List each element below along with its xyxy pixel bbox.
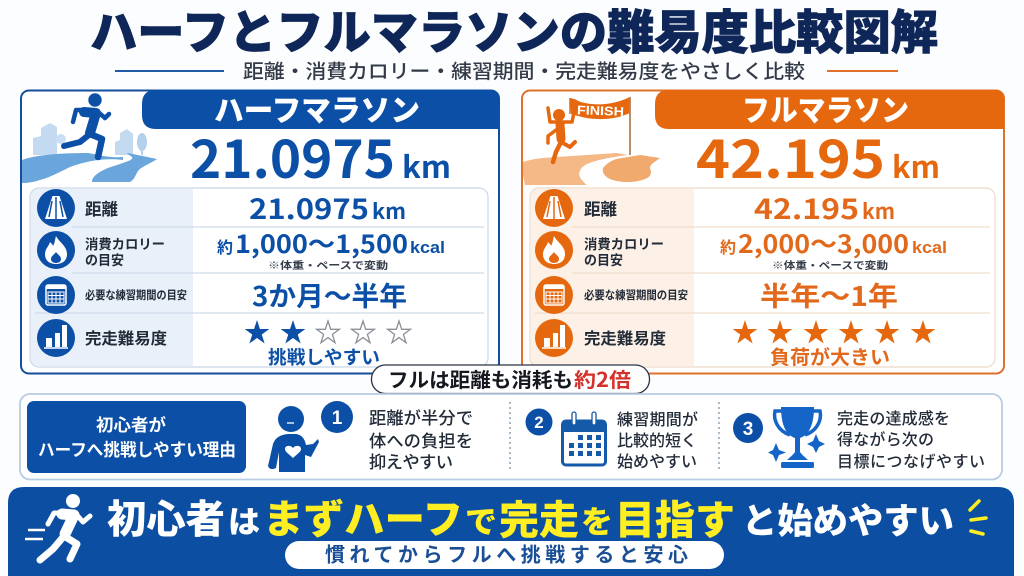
row: calories: の目安 [584,249,623,269]
full distance headline: km [892,143,940,187]
reasons heading box: ハーフへ挑戦しやすい理由 [38,437,236,462]
row: distance: 距離 [584,196,617,220]
ground right [92,153,157,182]
row: distance: km [862,196,895,226]
full distance headline [696,118,940,193]
banner headline: を [581,497,613,542]
callout: about double: フルは距離も消耗も [388,364,573,393]
row: calories [37,225,445,272]
icon: running figure [25,494,90,560]
row: difficulty: 挑戦しやすい [268,344,380,370]
reason 3: 得ながら次の [837,426,934,450]
row: difficulty: 完走難易度 [584,325,666,349]
reason 3: 完走の達成感を [837,405,950,429]
banner headline [107,487,954,546]
row: training period [37,275,407,314]
illustration: finish line runner: FINISH [577,103,624,119]
row: distance: km [372,196,406,226]
row: training period: 必要な練習期間の目安 [584,287,688,303]
row: calories: 消費カロリー [584,233,664,253]
icon: person with heart [268,406,319,472]
ground left [523,153,628,185]
reason 1: 体への負担を [369,427,473,452]
ground right [603,155,660,182]
row: distance: 距離 [85,196,118,220]
illustration: finish line runner [523,97,660,185]
reason 3: 目標につなげやすい [837,448,985,472]
row: difficulty: 完走難易度 [85,325,167,349]
row: calories: ※体重・ペースで変動 [268,257,388,272]
full comparison table [530,187,995,370]
illustration: city runner [22,93,157,183]
row: distance [535,187,895,227]
row: training period [535,275,898,314]
reason 1: 1 [332,408,343,429]
full header label: フルマラソン [742,86,909,130]
banner sub pill: 慣れてからフルへ挑戦すると安心 [325,538,688,568]
row: calories: 約 [217,234,233,258]
callout: about double: 約2倍 [574,364,631,393]
full distance headline: 42.195 [696,118,885,193]
row: calories: kcal [410,238,445,257]
half header label: ハーフマラソン [214,86,420,130]
panel: reasons for beginners [20,394,1002,480]
row: training period: 3か月～半年 [252,275,407,314]
reason 2: 始めやすい [617,448,697,472]
reason 3 [733,405,985,472]
reason 1 [321,401,473,473]
row: difficulty [535,319,935,370]
banner headline: 完走 [499,488,579,546]
banner headline: まずハーフ [263,487,463,545]
row: difficulty [37,319,410,370]
reason 1: 距離が半分で [369,404,473,429]
row: difficulty: 負荷が大きい [770,341,890,370]
reason 2: 2 [534,413,544,432]
ground left [22,153,123,183]
icon: yellow sparks [970,501,986,534]
reasons heading box: 初心者が [96,411,166,436]
half distance headline: 21.0975 [190,118,395,193]
banner: conclusion [8,487,1014,576]
banner headline: と始めやすい [742,493,954,544]
icon: trophy [768,407,825,468]
row: distance [37,187,406,227]
banner headline: で [465,497,497,542]
reason 2: 比較的短く [617,427,697,451]
reason 1: 抑えやすい [369,448,453,473]
banner headline: は [228,497,260,542]
subtitle with side rules: 距離・消費カロリー・練習期間・完走難易度をやさしく比較 [243,55,806,84]
row: distance: 21.0975 [249,187,369,227]
reason 2 [526,406,698,472]
half comparison table [30,187,488,370]
reason 3: 3 [743,419,753,440]
row: calories: ※体重・ペースで変動 [772,257,888,272]
icon: calendar [562,412,606,465]
row: calories: 約 [720,234,736,258]
panel: full marathon [522,86,1004,374]
row: training period: 必要な練習期間の目安 [85,287,187,303]
banner headline: 目指す [615,488,735,546]
banner headline: 初心者 [107,489,225,545]
row: training period: 半年～1年 [760,275,898,314]
row: calories: 1,000～1,500 [235,225,408,261]
reasons heading box [27,401,246,473]
half distance headline: km [402,143,451,187]
row: calories: kcal [912,238,947,257]
half header band [142,90,499,129]
callout: about double [372,364,650,394]
finish banner [570,97,630,119]
full header band [655,90,1004,129]
row: calories: の目安 [85,249,124,269]
row: distance: 42.195 [754,187,859,227]
panel: half marathon [21,86,499,374]
row: calories: 消費カロリー [85,233,165,253]
reason 2: 練習期間が [617,406,698,430]
row: calories: 2,000～3,000 [738,225,909,261]
row: calories [535,225,947,272]
